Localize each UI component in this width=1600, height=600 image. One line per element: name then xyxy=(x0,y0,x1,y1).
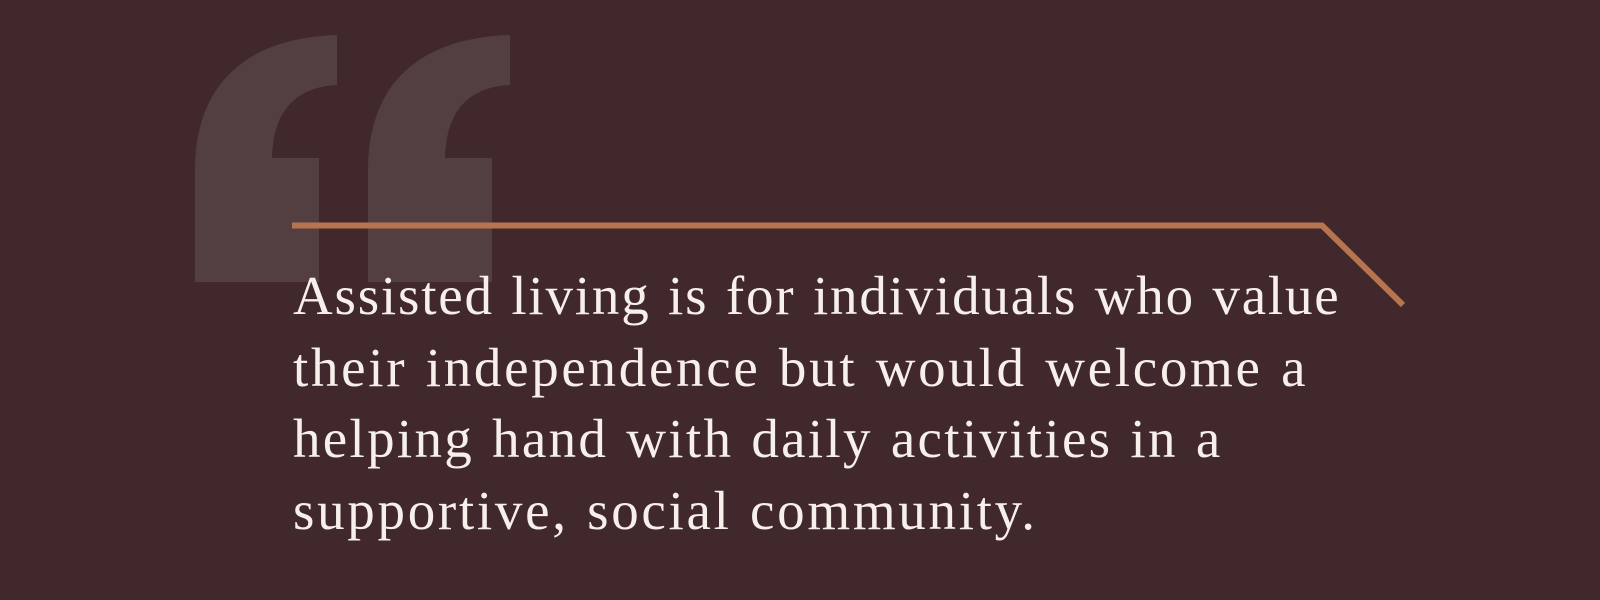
quote text: supportive, social community. xyxy=(293,480,1038,540)
icon: quote mark xyxy=(195,35,510,282)
quote text: their independence but would welcome a xyxy=(293,336,1308,398)
accent line xyxy=(292,226,1403,305)
quote text: Assisted living is for individuals who value xyxy=(293,265,1341,326)
quote text: helping hand with daily activities in a xyxy=(293,408,1223,469)
quote text xyxy=(293,265,1341,540)
